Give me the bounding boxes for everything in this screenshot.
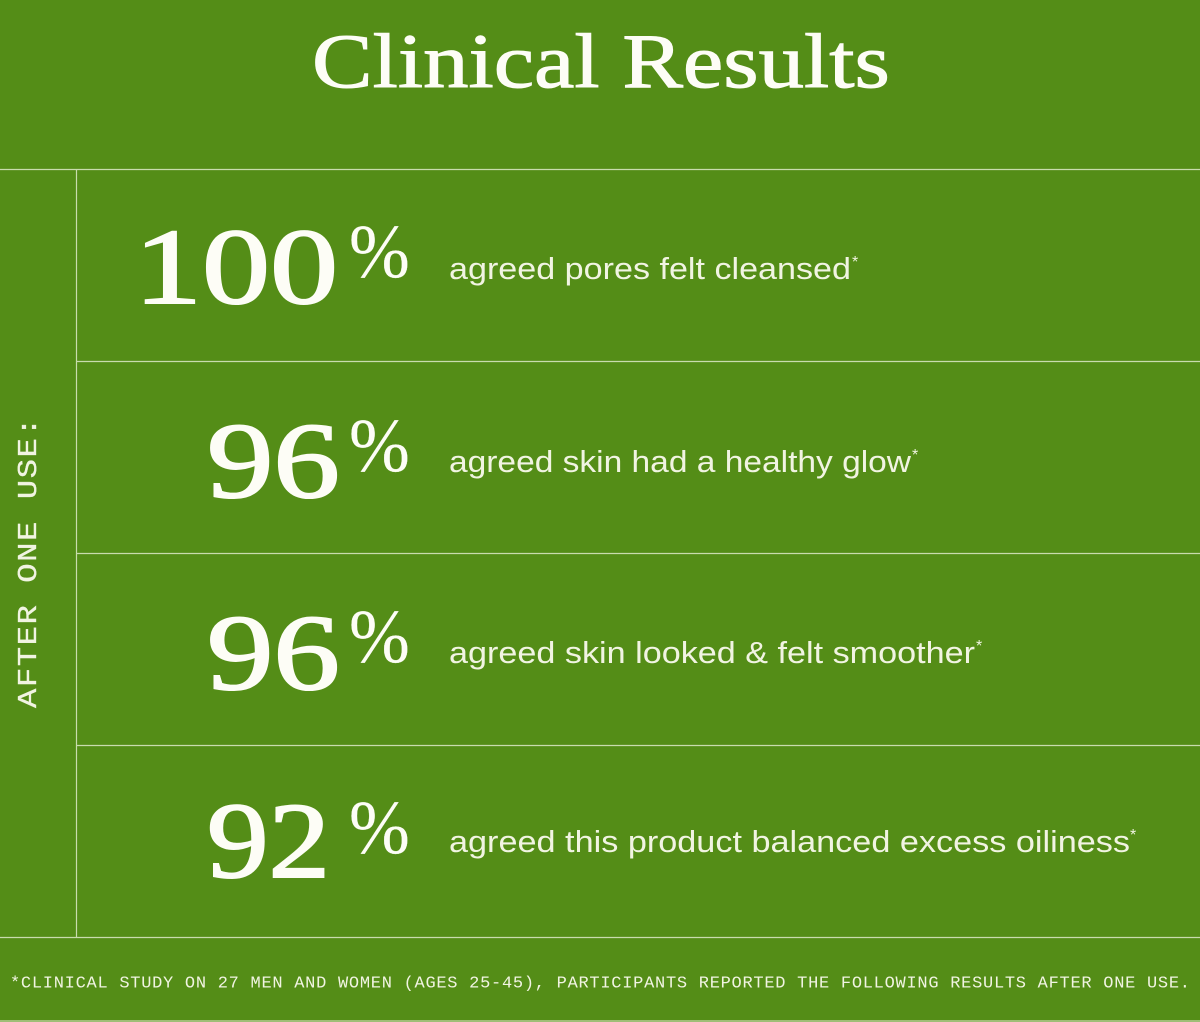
result row: 100% pores cleansed: agreed pores felt cleansed xyxy=(449,251,851,286)
result row: 92% balanced oiliness: % xyxy=(349,787,410,870)
footnote: *CLINICAL STUDY ON 27 MEN AND WOMEN (AGES 25-45), PARTICIPANTS REPORTED THE FOLLOWING RESULTS AFTER ONE USE. xyxy=(10,974,1190,994)
result row: 96% looked and felt smoother: % xyxy=(349,596,410,679)
result row: 92% balanced oiliness: * xyxy=(1130,827,1136,844)
result row: 100% pores cleansed xyxy=(134,207,858,327)
result row: 96% healthy glow: agreed skin had a healthy glow xyxy=(449,444,912,479)
result row: 96% looked and felt smoother xyxy=(207,594,982,713)
result row: 100% pores cleansed: * xyxy=(852,254,858,271)
title: Clinical Results xyxy=(312,19,890,104)
result row: 100% pores cleansed: 100 xyxy=(134,207,338,327)
result row: 92% balanced oiliness: agreed this product balanced excess oiliness xyxy=(449,824,1130,859)
result row: 96% healthy glow: % xyxy=(349,405,410,488)
side label: after one use: AFTER ONE USE: xyxy=(13,416,44,708)
result row: 96% looked and felt smoother: agreed skin looked & felt smoother xyxy=(449,635,975,670)
result row: 96% healthy glow: 96 xyxy=(207,402,340,521)
result row: 96% looked and felt smoother: * xyxy=(976,638,982,655)
result row: 96% looked and felt smoother: 96 xyxy=(207,594,340,713)
result row: 96% healthy glow: * xyxy=(912,447,918,464)
result row: 92% balanced oiliness xyxy=(207,782,1136,901)
result row: 96% healthy glow xyxy=(207,402,918,521)
result row: 92% balanced oiliness: 92 xyxy=(207,782,330,901)
result row: 100% pores cleansed: % xyxy=(349,211,410,294)
